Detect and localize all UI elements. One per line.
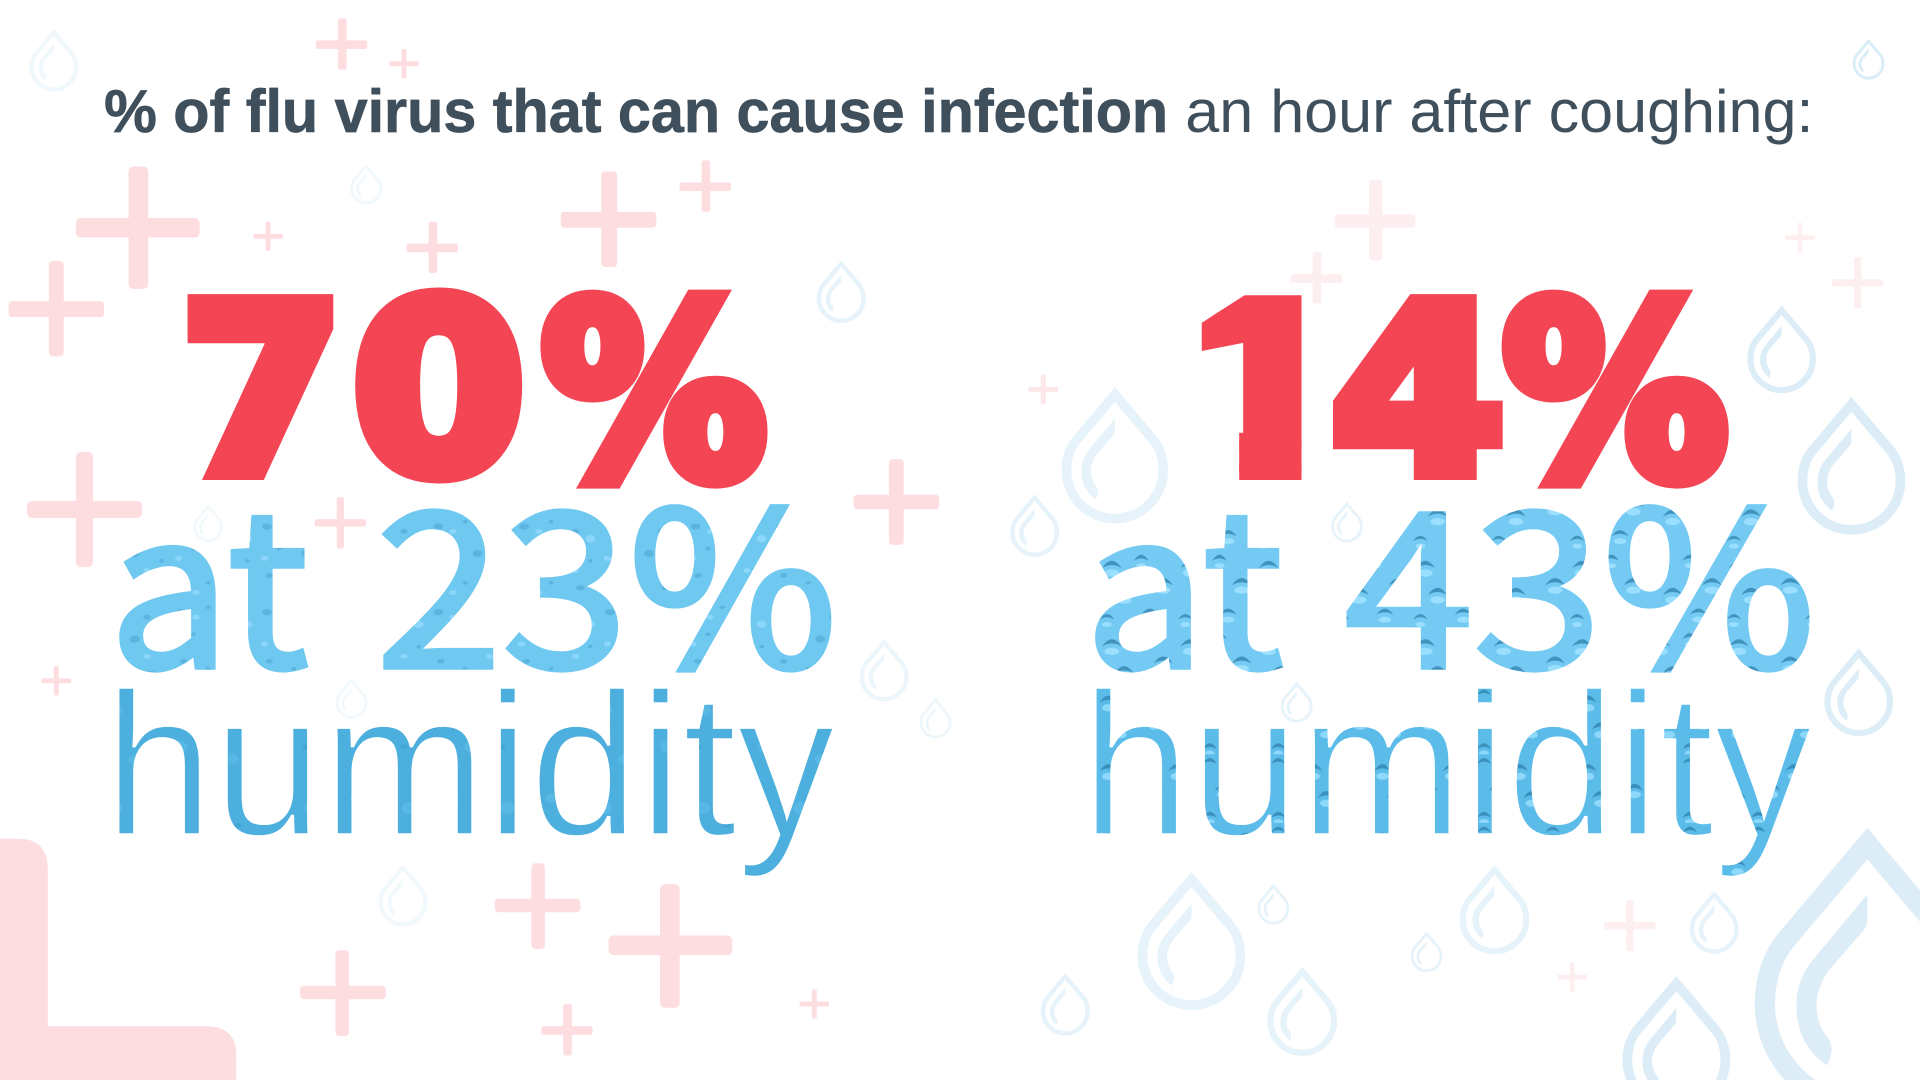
- label at 43%: [1085, 418, 1816, 730]
- label at 23%: [109, 418, 838, 730]
- label at 43%: 43%: [1344, 418, 1816, 730]
- big number 14%: %: [1503, 254, 1728, 533]
- big number 70%: %: [541, 254, 766, 533]
- background: plus signs: [9, 18, 1058, 1056]
- big number 70%: [181, 253, 766, 533]
- stat: 70% at 23% humidity: [104, 253, 838, 879]
- big number 70%: 7: [181, 257, 343, 526]
- big number 14%: 1: [1183, 257, 1352, 526]
- corner L shape: [0, 839, 236, 1080]
- title: an hour after coughing:: [1185, 78, 1813, 145]
- label humidity: humidity: [104, 651, 835, 879]
- label at 23%: 23%: [376, 418, 838, 730]
- big number 14%: [1202, 290, 1729, 489]
- label humidity: humidity: [1081, 651, 1812, 879]
- big number 14%: 4: [1331, 256, 1505, 526]
- label at 23%: at: [109, 418, 309, 730]
- title: [104, 78, 1813, 145]
- stat: 14% at 43% humidity: [1081, 254, 1816, 879]
- title: % of flu virus that can cause infection: [104, 78, 1168, 145]
- label at 43%: at: [1085, 418, 1283, 730]
- big number 70%: 0: [353, 253, 525, 528]
